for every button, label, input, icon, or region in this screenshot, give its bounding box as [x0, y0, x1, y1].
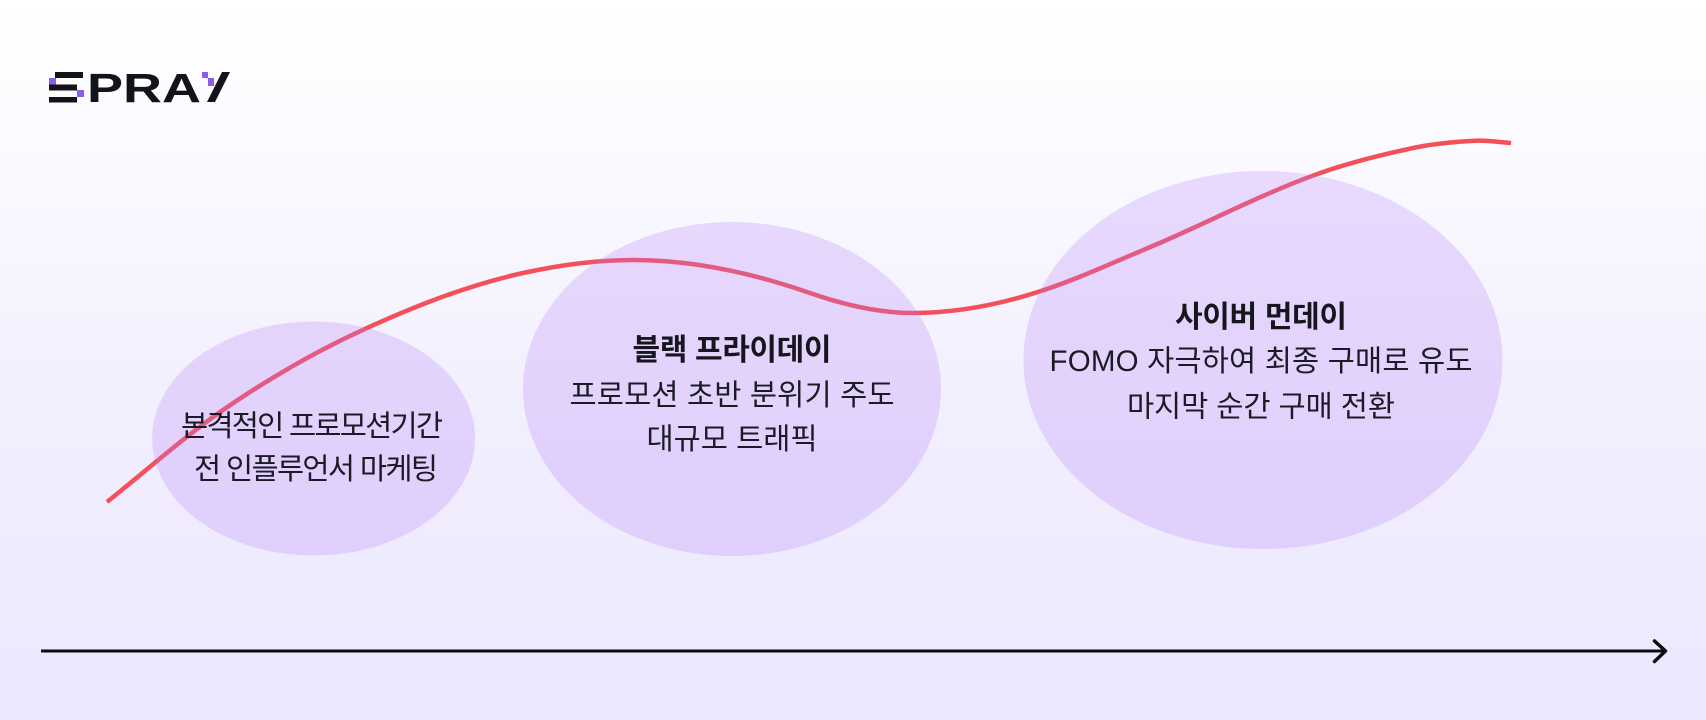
- text: black friday: [570, 325, 894, 456]
- circle: cyber monday: [1024, 171, 1502, 549]
- logo: SPRAY: PRA: [87, 65, 201, 111]
- text: black friday: 블랙 프라이데이: [632, 325, 832, 369]
- circle: black friday: [523, 222, 941, 556]
- text: black friday: 대규모 트래픽: [646, 423, 818, 456]
- text: cyber monday: [1050, 292, 1472, 424]
- time axis arrow: [41, 641, 1666, 662]
- text: pre-promotion influencer marketing: 본격적인 프로모션기간: [181, 410, 443, 443]
- text: cyber monday: 마지막 순간 구매 전환: [1127, 390, 1395, 424]
- text: cyber monday: FOMO 자극하여 최종 구매로 유도: [1050, 345, 1472, 378]
- text: black friday: 프로모션 초반 분위기 주도: [570, 379, 894, 412]
- circle: pre-promotion: [152, 322, 475, 556]
- text: pre-promotion influencer marketing: [181, 410, 443, 486]
- logo: SPRAY: [49, 65, 230, 111]
- trend curve: [107, 141, 1511, 502]
- text: cyber monday: 사이버 먼데이: [1175, 292, 1347, 336]
- text: pre-promotion influencer marketing: 전 인플루언서 마케팅: [194, 453, 438, 486]
